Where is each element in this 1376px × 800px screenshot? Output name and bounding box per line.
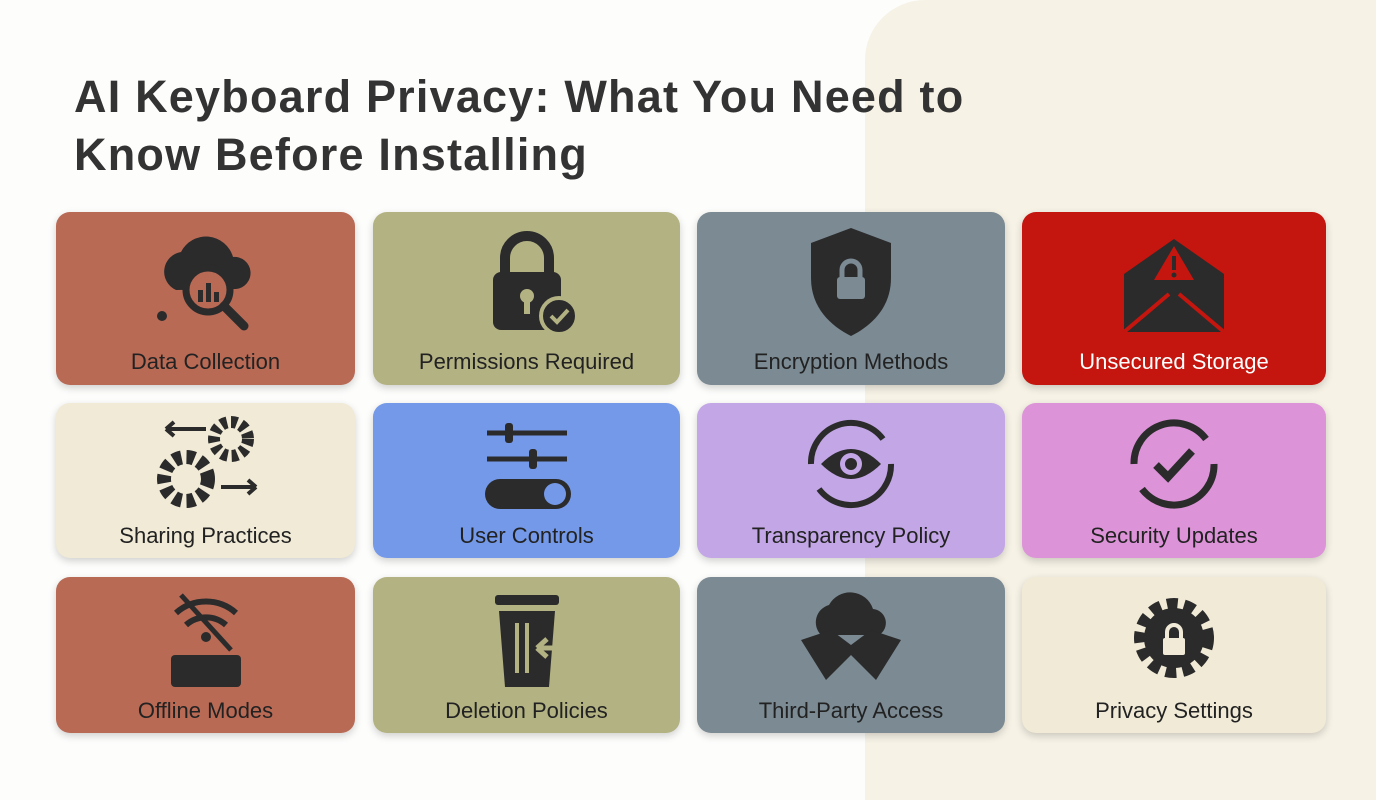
icon: shield lock xyxy=(811,228,891,336)
card: Transparency Policy xyxy=(697,403,1005,558)
icon: cloud search xyxy=(157,236,251,330)
title: AI Keyboard Privacy: What You Need to xyxy=(74,71,964,122)
card: Unsecured Storage xyxy=(1022,212,1326,385)
card: Encryption Methods xyxy=(697,212,1005,385)
icon: no wifi keyboard xyxy=(171,593,241,687)
card: Offline Modes xyxy=(56,577,355,733)
card: Data Collection xyxy=(56,212,355,385)
label: Offline Modes xyxy=(138,698,273,723)
icon: cloud handshake xyxy=(801,592,901,680)
icon: padlock check xyxy=(493,231,575,332)
label: Permissions Required xyxy=(419,349,634,374)
label: Transparency Policy xyxy=(752,523,950,548)
icon: gear lock xyxy=(1134,598,1214,678)
label: User Controls xyxy=(459,523,594,548)
label: Unsecured Storage xyxy=(1079,349,1269,374)
card: Sharing Practices xyxy=(56,403,355,558)
icon: trash bin xyxy=(495,595,559,687)
icon: refresh check xyxy=(1130,419,1218,509)
label: Security Updates xyxy=(1090,523,1258,548)
icon: eye cycle xyxy=(808,420,894,508)
card: Deletion Policies xyxy=(373,577,680,733)
label: Data Collection xyxy=(131,349,280,374)
title: Know Before Installing xyxy=(74,129,588,180)
card: User Controls xyxy=(373,403,680,558)
label: Third-Party Access xyxy=(759,698,943,723)
title xyxy=(74,71,964,180)
icon: warning envelope xyxy=(1124,239,1224,332)
card: Third-Party Access xyxy=(697,577,1005,733)
icon: gears arrows xyxy=(157,416,258,508)
card: Security Updates xyxy=(1022,403,1326,558)
card: Permissions Required xyxy=(373,212,680,385)
card: Privacy Settings xyxy=(1022,577,1326,733)
icon: sliders toggle xyxy=(485,423,571,509)
label: Sharing Practices xyxy=(119,523,292,548)
label: Deletion Policies xyxy=(445,698,608,723)
label: Privacy Settings xyxy=(1095,698,1253,723)
label: Encryption Methods xyxy=(754,349,948,374)
